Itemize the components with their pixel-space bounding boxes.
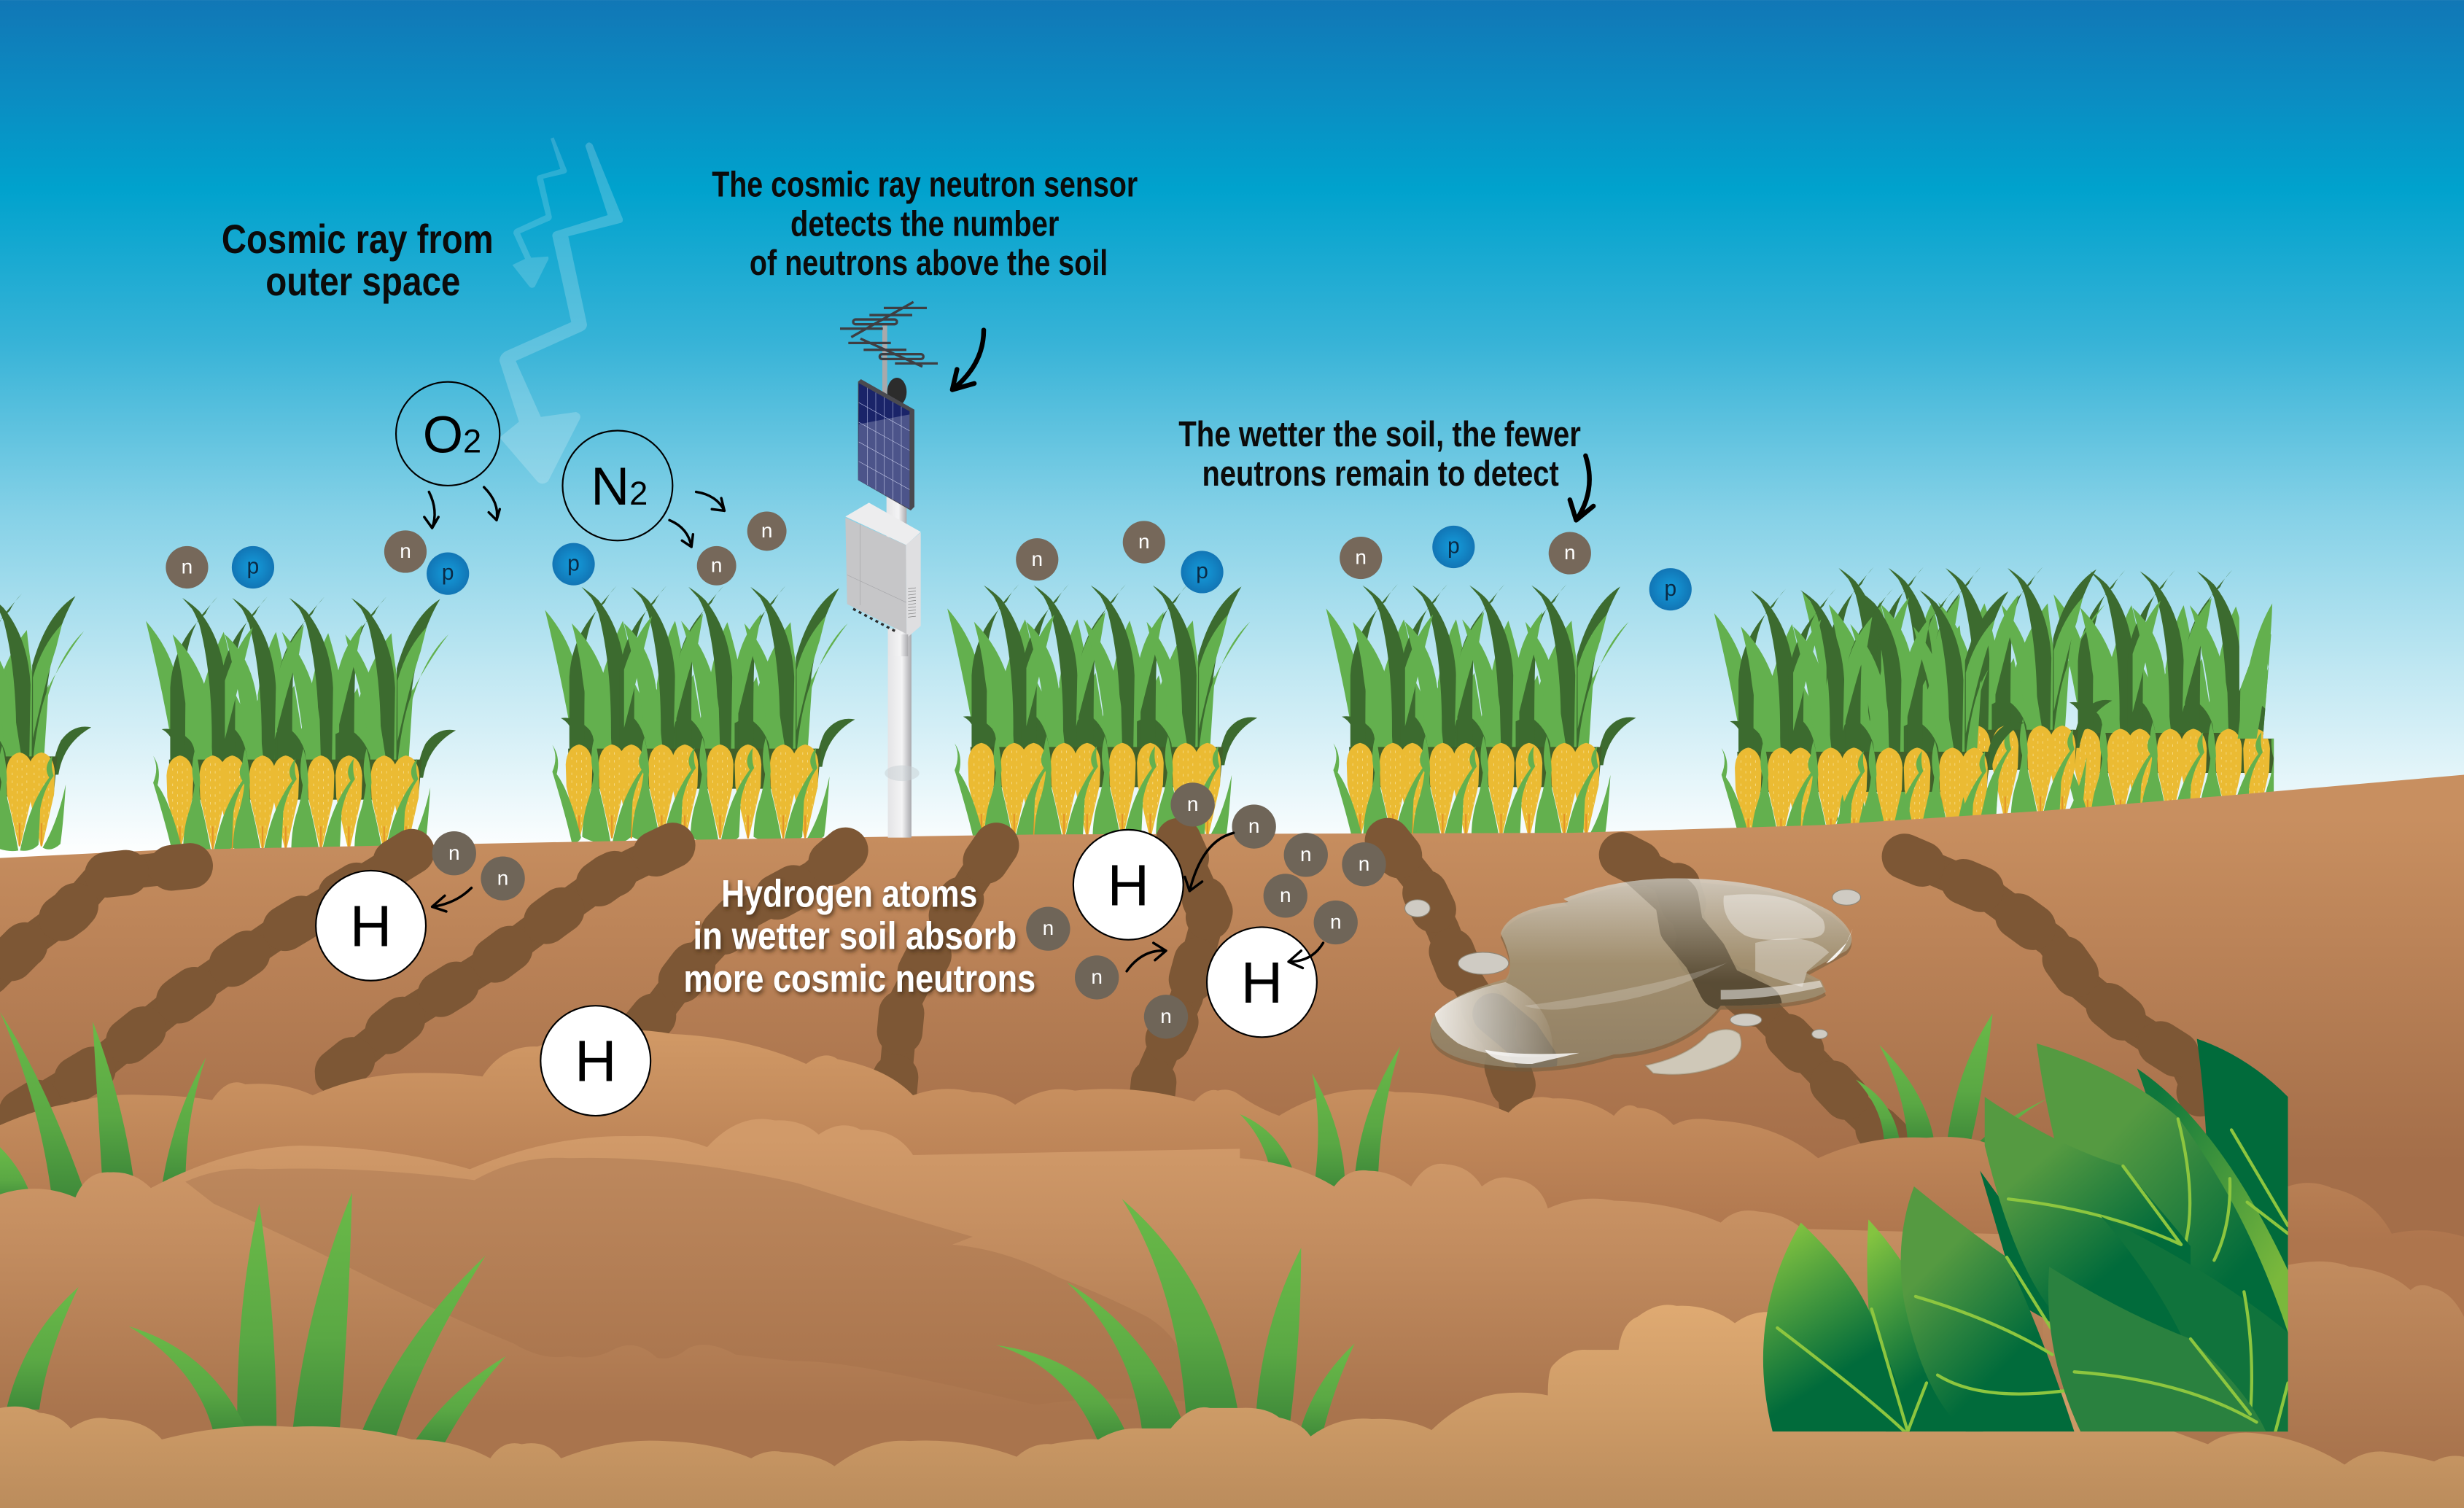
neutrons in soil: n [1160,1005,1172,1027]
soil foreground layer D [0,1305,2464,1508]
molecule N2 [562,431,672,540]
free neutrons and protons above crops: n [761,519,772,542]
back light leaf [2137,1069,2288,1432]
arrow to sensor [952,330,984,389]
puddle body [1430,879,1851,1068]
label: cosmic ray [222,216,494,304]
free neutrons and protons above crops [166,511,1692,610]
free neutrons and protons above crops: n [182,556,193,578]
solar panel [858,379,914,510]
soil mound layer B [0,1119,2288,1508]
lightning bolt: cosmic ray [500,137,623,483]
neutrons in soil: n [1330,911,1342,933]
label: sensor [712,163,1138,283]
neutrons in soil: n [448,842,460,864]
front dark leaf [2048,1267,2266,1431]
grass tufts middle [0,1012,1400,1202]
big leaf upper [2037,1043,2288,1431]
neutrons in soil: n [1280,884,1291,906]
right end leaf [2238,604,2272,739]
hydrogen atoms: H [575,1029,617,1094]
neutrons in soil [432,782,1386,1038]
free neutrons and protons above crops: n [400,540,411,562]
corn rows [0,567,2363,854]
sky background [0,0,2464,857]
free neutrons and protons above crops: p [247,555,259,579]
big leaf middle [1985,1097,2191,1339]
free neutrons and protons above crops: p [1664,577,1676,601]
bottom right leaves [1763,1038,2310,1431]
label: hydrogen atoms: more cosmic neutrons [683,957,1035,1000]
back dark leaf [2197,1038,2288,1431]
molecule O2: 2 [463,423,481,460]
grass tuft lower center [996,1199,1355,1442]
free neutrons and protons above crops: n [1031,548,1043,570]
corn cluster right back 1 [1802,567,2112,824]
neutrons in soil: n [1043,917,1054,939]
corn cluster 6 [1714,589,2024,847]
neutrons in soil: n [1248,815,1259,837]
soil mound layer A [0,1030,2464,1508]
corn cluster 3 [545,586,855,843]
lower pole [889,634,908,656]
neutrons in soil: n [1300,843,1312,866]
neutrons in soil: n [1359,852,1369,875]
soil furrows [0,841,2200,1138]
small puddle [1645,1030,1741,1075]
corn cluster right back 2 [2053,570,2363,828]
puddle shadow [1430,882,1851,1072]
dark leaf behind [1980,1171,2050,1321]
dark leaf right [2101,1216,2288,1431]
hydrogen atoms [316,830,1317,1116]
free neutrons and protons above crops: n [1138,530,1150,553]
puddle highlights [1723,894,1824,940]
label: sensor: The cosmic ray neutron sensor [712,163,1138,204]
corn cluster far left [0,594,91,851]
molecule N2: N2 [591,456,648,516]
free neutrons and protons above crops: n [1564,541,1576,564]
free neutrons and protons above crops: p [1447,535,1460,559]
small arrows [424,487,1323,971]
grass tuft left [0,1012,87,1197]
free neutrons and protons above crops: p [567,551,580,575]
corn cluster 2 [146,596,456,854]
label: cosmic ray: Cosmic ray from [222,216,494,262]
hydrogen atoms: H [1107,852,1149,917]
arrow to soil neutrons [1570,456,1593,520]
puddle [1405,868,1860,1075]
corn cluster 5 [1326,584,1636,842]
sensor station [840,302,938,656]
label: wetter soil [1178,413,1581,494]
center leaf [1901,1186,2075,1431]
grass behind mound [1856,1014,2048,1143]
hydrogen atoms: H [1241,950,1283,1015]
enclosure box [845,502,921,545]
molecule O2 [396,382,500,486]
neutrons in soil: n [1187,793,1198,815]
free neutrons and protons above crops: n [1355,546,1367,569]
label: wetter soil: The wetter the soil, the fewer [1178,413,1581,454]
left front leaf [1763,1223,1911,1431]
neutrons in soil: n [1091,965,1103,988]
soil right layer [2043,1262,2464,1508]
soil darker patch [185,1158,1240,1408]
hydrogen atoms: H [350,893,392,958]
label: hydrogen atoms: Hydrogen atoms [721,872,977,915]
water droplets [1405,890,1860,1038]
antenna mast [882,323,887,396]
ground [0,774,2464,1508]
label: sensor: detects the number [790,203,1059,244]
upper pole [887,496,906,537]
molecule O2: O [423,407,463,465]
free neutrons and protons above crops: p [1196,559,1208,583]
sensor dome [887,378,906,406]
furrow seen through water [1493,868,1760,1061]
big bolt [500,142,623,483]
small bolt [513,137,567,288]
label: hydrogen atoms: in wetter soil absorb [693,915,1017,958]
back left leaf [1867,1219,1983,1431]
antenna [840,302,938,367]
grass tuft lower left [7,1193,506,1446]
label: sensor: of neutrons above the soil [750,242,1108,283]
grass tuft center [1355,1046,1400,1178]
label: cosmic ray: outer space [265,258,460,304]
corn cluster 4 [947,584,1257,842]
sensor pole [885,629,920,838]
free neutrons and protons above crops: p [442,561,454,585]
label: wetter soil: neutrons remain to detect [1202,453,1559,494]
free neutrons and protons above crops: n [711,553,722,576]
neutrons in soil: n [497,866,508,889]
label: hydrogen atoms [683,872,1035,1000]
